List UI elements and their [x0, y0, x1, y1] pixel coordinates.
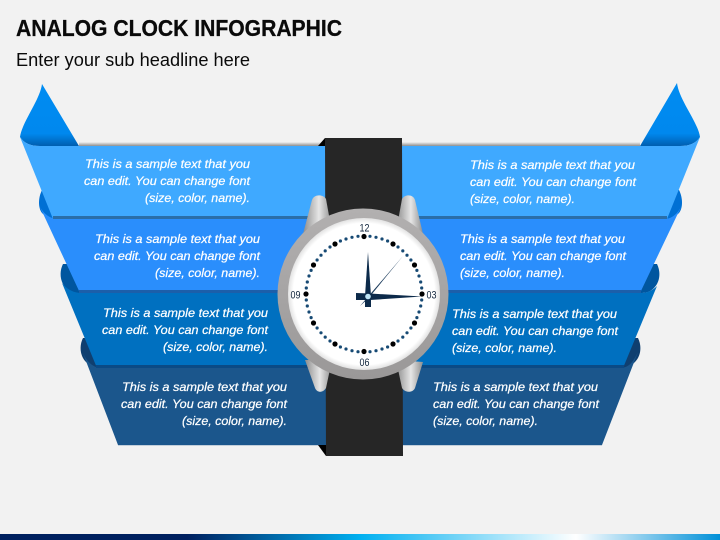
clock numerals	[290, 222, 436, 369]
subtitle: Enter your sub headline here	[16, 50, 250, 70]
left text blocks: This is a sample text that you	[103, 306, 268, 320]
clock numerals: 12	[360, 222, 370, 234]
band 3 blue	[61, 264, 659, 368]
left text blocks: can edit. You can change font	[94, 249, 261, 263]
clock hands	[356, 252, 422, 307]
clock numerals: 03	[426, 290, 436, 302]
right text blocks: can edit. You can change font	[470, 175, 637, 189]
left text blocks: This is a sample text that you	[122, 380, 287, 394]
band 1 light blue	[20, 137, 700, 219]
bottom gradient bar	[0, 534, 720, 540]
right text blocks: can edit. You can change font	[452, 324, 619, 338]
top shadow line	[79, 142, 640, 146]
clock numerals: 06	[360, 357, 370, 369]
left text blocks: can edit. You can change font	[121, 397, 288, 411]
left text blocks: (size, color, name).	[163, 340, 268, 354]
right text blocks: This is a sample text that you	[470, 158, 635, 172]
right text blocks: (size, color, name).	[452, 341, 557, 355]
band 2 medium blue	[39, 190, 682, 293]
left text blocks: can edit. You can change font	[84, 174, 251, 188]
right text blocks: (size, color, name).	[433, 414, 538, 428]
right text blocks: can edit. You can change font	[460, 249, 627, 263]
left text blocks: This is a sample text that you	[85, 157, 250, 171]
left text blocks: This is a sample text that you	[95, 232, 260, 246]
right text blocks: This is a sample text that you	[460, 232, 625, 246]
watch strap	[318, 138, 403, 456]
band 4 dark blue	[81, 338, 640, 446]
left text blocks: (size, color, name).	[182, 414, 287, 428]
clock case	[278, 208, 448, 380]
title: ANALOG CLOCK INFOGRAPHIC	[16, 15, 342, 41]
clock numerals: 09	[290, 290, 300, 302]
right text blocks: (size, color, name).	[460, 266, 565, 280]
left text blocks	[84, 157, 288, 428]
hour dots	[303, 234, 425, 354]
right text blocks	[433, 158, 637, 428]
ribbon folds at top	[20, 83, 700, 146]
right text blocks: (size, color, name).	[470, 192, 575, 206]
watch lugs	[303, 195, 423, 392]
left text blocks: can edit. You can change font	[102, 323, 269, 337]
minute dots	[305, 235, 423, 353]
right text blocks: This is a sample text that you	[433, 380, 598, 394]
right text blocks: This is a sample text that you	[452, 307, 617, 321]
clock face	[288, 218, 440, 370]
left text blocks: (size, color, name).	[155, 266, 260, 280]
right text blocks: can edit. You can change font	[433, 397, 600, 411]
left text blocks: (size, color, name).	[145, 191, 250, 205]
